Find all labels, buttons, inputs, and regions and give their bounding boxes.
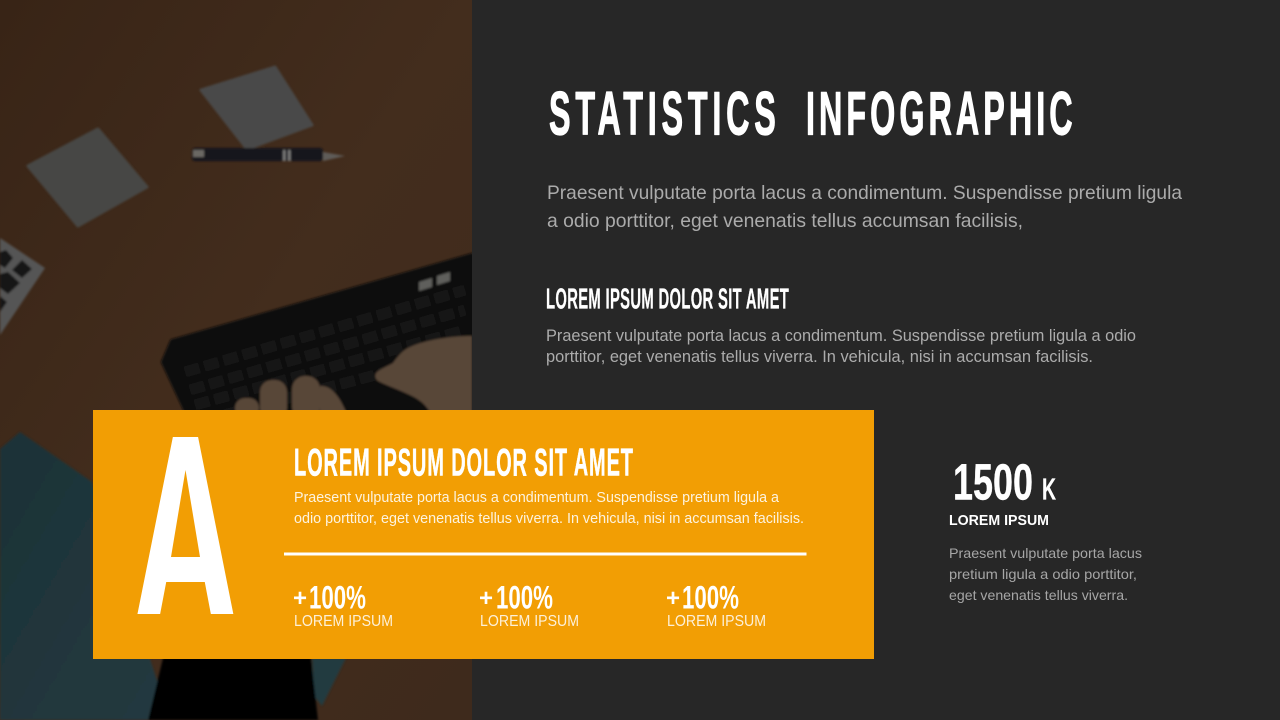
stat 3: + xyxy=(666,585,680,612)
panel: orange callout xyxy=(93,386,874,664)
stat 2: LOREM IPSUM xyxy=(480,613,579,630)
photo panel: desk with keyboard xyxy=(0,0,472,720)
intro paragraph: Praesent vulputate porta lacus a condimentum. Suspendisse pretium ligula xyxy=(547,182,1182,204)
big letter A xyxy=(136,386,235,664)
big letter A: A xyxy=(136,386,235,664)
statistic paragraph: pretium ligula a odio porttitor, xyxy=(949,566,1137,582)
big number: K xyxy=(1042,472,1056,506)
section heading: LOREM IPSUM DOLOR SIT AMET xyxy=(546,282,789,315)
title xyxy=(549,81,1073,148)
intro paragraph: a odio porttitor, eget venenatis tellus accumsan facilisis, xyxy=(547,210,1023,232)
side statistic xyxy=(949,454,1142,603)
title: INFOGRAPHIC xyxy=(806,81,1073,148)
stat 1: + xyxy=(293,585,307,612)
statistic paragraph xyxy=(949,545,1142,603)
callout paragraph: odio porttitor, eget venenatis tellus viverra. In vehicula, nisi in accumsan facilisis. xyxy=(294,511,804,527)
statistic paragraph: Praesent vulputate porta lacus xyxy=(949,545,1142,561)
stat 1: 100% xyxy=(309,580,366,616)
intro paragraph xyxy=(547,182,1182,232)
icon: calculator xyxy=(0,238,45,335)
title: STATISTICS xyxy=(549,81,776,148)
icon: hands on keyboard xyxy=(235,336,472,420)
section paragraph: porttitor, eget venenatis tellus viverra. In vehicula, nisi in accumsan facilisis. xyxy=(546,348,1093,366)
big number: 1500 xyxy=(953,454,1033,510)
stat 1 xyxy=(293,580,393,630)
callout heading: LOREM IPSUM DOLOR SIT AMET xyxy=(294,440,633,484)
callout divider xyxy=(284,552,806,556)
stat 3: LOREM IPSUM xyxy=(667,613,766,630)
statistic paragraph: eget venenatis tellus viverra. xyxy=(949,587,1128,603)
icon: right paper note xyxy=(201,67,312,149)
icon: dark sleeve xyxy=(148,659,319,720)
callout paragraph: Praesent vulputate porta lacus a condimentum. Suspendisse pretium ligula a xyxy=(294,490,780,506)
stat 2: 100% xyxy=(496,580,553,616)
section paragraph xyxy=(546,327,1136,366)
stat 2 xyxy=(479,580,579,630)
stat 2: + xyxy=(479,585,493,612)
stat 1: LOREM IPSUM xyxy=(294,613,393,630)
icon: pen xyxy=(192,148,345,161)
icon: teal tablet right edge xyxy=(310,659,346,706)
icon: tablet xyxy=(0,432,170,720)
callout paragraph xyxy=(294,490,804,527)
statistic label: LOREM IPSUM xyxy=(949,512,1049,529)
section paragraph: Praesent vulputate porta lacus a condimentum. Suspendisse pretium ligula a odio xyxy=(546,327,1136,345)
icon: left paper note xyxy=(28,129,147,226)
stat 3: 100% xyxy=(682,580,739,616)
stat 3 xyxy=(666,580,766,630)
icon: keyboard xyxy=(163,255,472,420)
